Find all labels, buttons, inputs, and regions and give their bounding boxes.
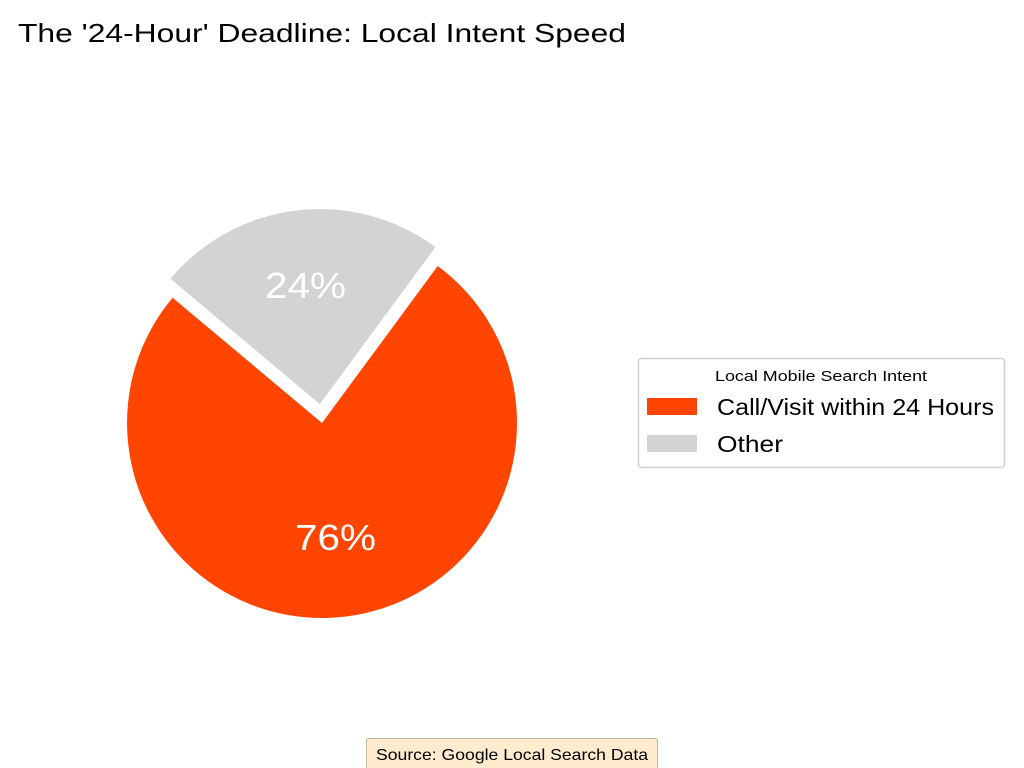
legend item: other: [647, 431, 783, 457]
source note: Source: Google Local Search Data: [376, 747, 648, 764]
legend: [638, 358, 1004, 468]
legend item: call/visit: Call/Visit within 24 Hours: [717, 394, 994, 420]
legend item: other: Other: [717, 431, 783, 457]
legend: Local Mobile Search Intent: [715, 368, 928, 385]
label: 76%: 76%: [295, 517, 376, 558]
slice: call/visit 76%: [127, 266, 517, 618]
pie chart: [127, 209, 517, 618]
source note: [366, 738, 658, 768]
slice: other 24%: [170, 209, 436, 404]
title: The '24-Hour' Deadline: Local Intent Speed: [18, 18, 626, 48]
label: 24%: 24%: [265, 265, 346, 306]
